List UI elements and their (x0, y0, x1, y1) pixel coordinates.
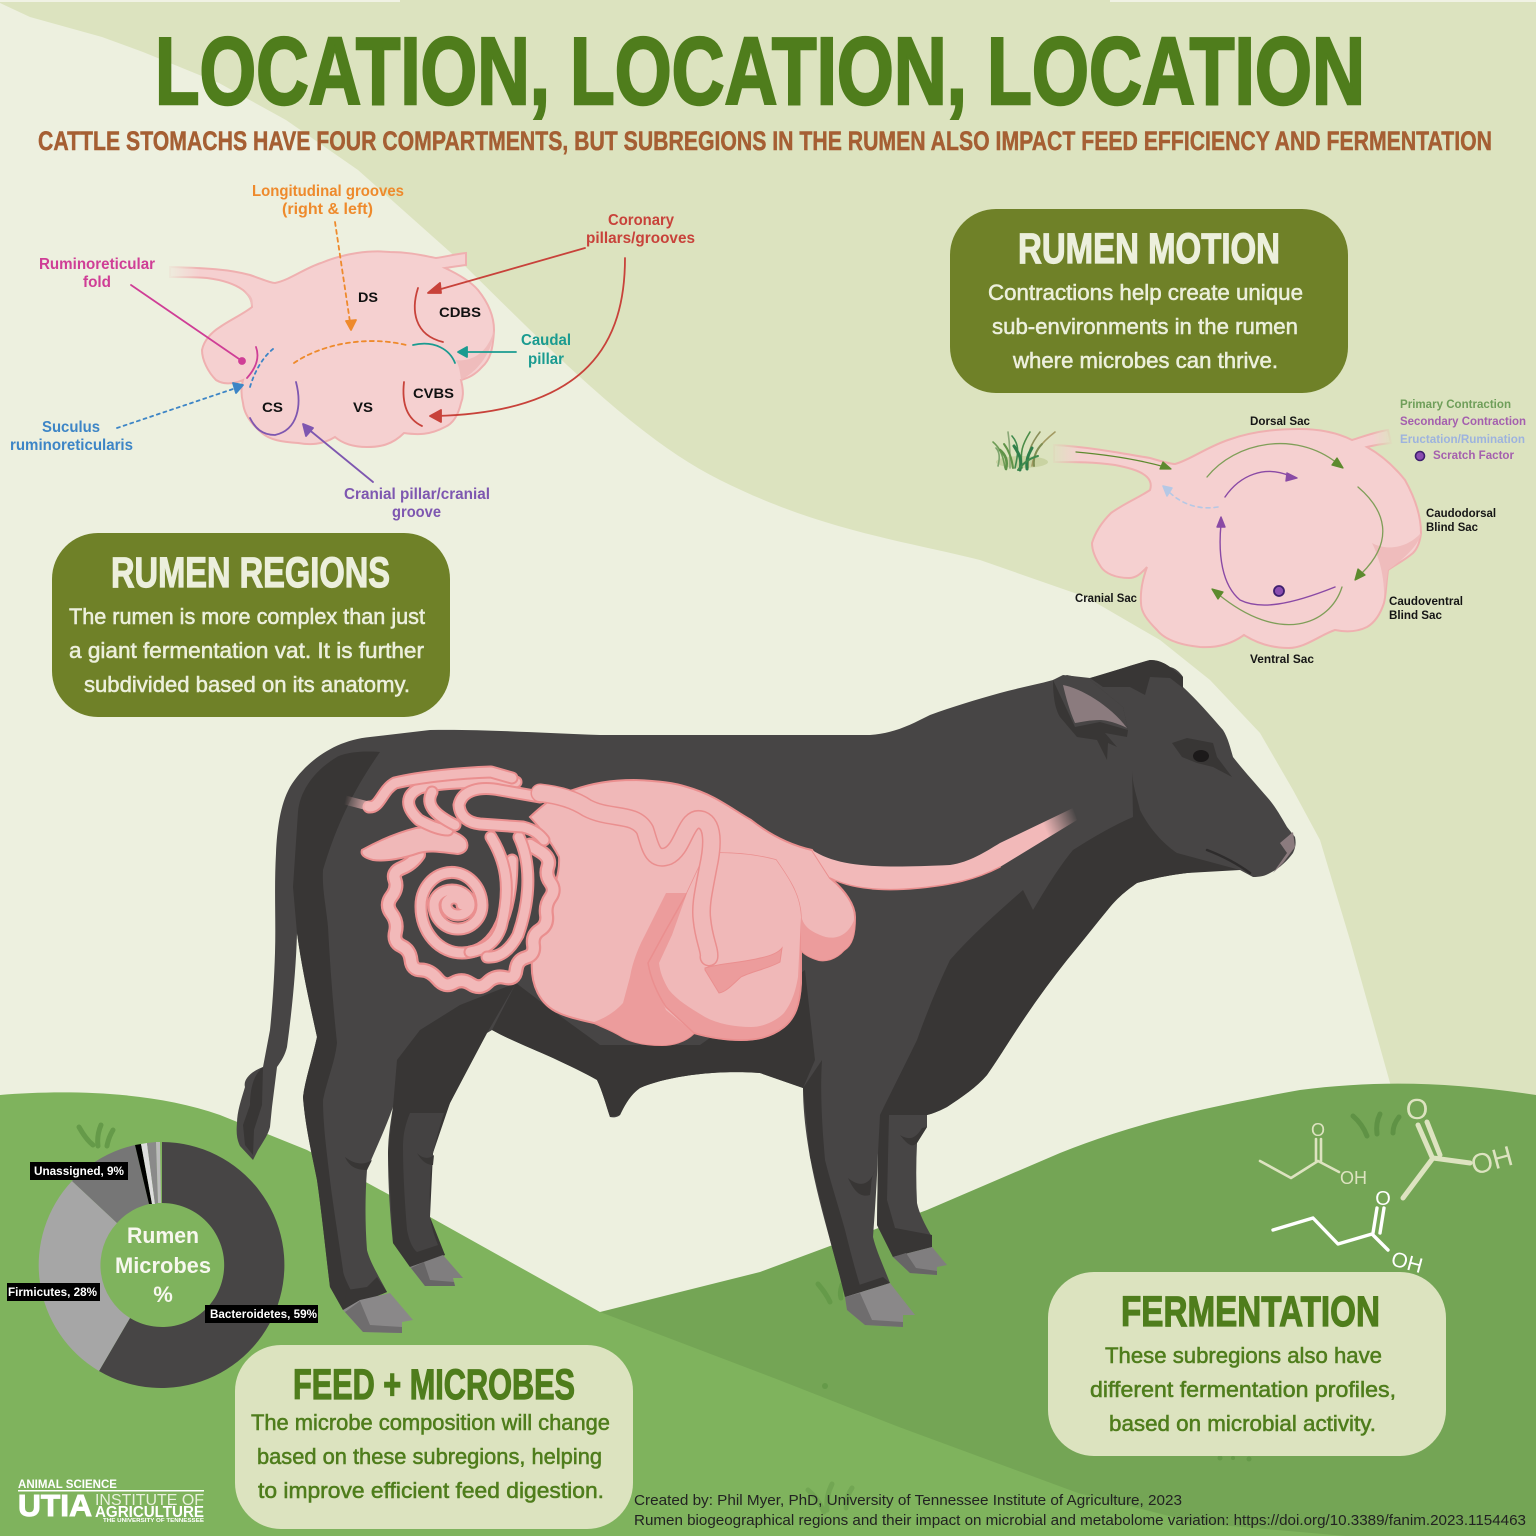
donut chart: rumen microbes (7, 1142, 318, 1388)
heading: fermentation: FERMENTATION (1121, 1288, 1380, 1336)
text: feed body: The microbe composition will change (251, 1410, 610, 1435)
logo: UTIA (18, 1479, 204, 1524)
label: cranial pillar (344, 486, 490, 521)
panel: rumen regions (52, 533, 450, 717)
sac labels (1075, 414, 1496, 666)
donut centre text: Microbes (115, 1253, 211, 1278)
footer credits: Created by: Phil Myer, PhD, University of Tennessee Institute of Agriculture, 2023 (634, 1492, 1182, 1509)
molecule: propionic acid (1260, 1120, 1367, 1188)
molecule: propionic acid: O (1311, 1120, 1325, 1140)
abomasum lobe (648, 853, 801, 1040)
label: suculus ruminoreticularis: ruminoreticularis (10, 437, 133, 454)
rumen shape (170, 251, 494, 447)
logo: UTIA: AGRICULTURE (95, 1504, 204, 1521)
label: longitudinal grooves: (right & left) (282, 201, 373, 218)
notch fold (705, 948, 782, 993)
sac labels: VS (353, 399, 373, 415)
donut centre text: % (153, 1282, 173, 1307)
cow silhouette (237, 660, 1296, 1310)
esophagus fade (1050, 440, 1080, 465)
arrows: secondary contraction (1217, 472, 1335, 605)
sac labels (262, 289, 481, 415)
shading: neck and chest (880, 768, 1240, 1115)
text: fermentation body (1090, 1343, 1396, 1436)
data label: firmicutes: Firmicutes, 28% (8, 1285, 97, 1299)
donut centre text: Rumen (127, 1223, 199, 1248)
hoof: near hind (343, 1293, 413, 1333)
spiral colon (421, 860, 512, 953)
shading: knee marks (345, 1127, 927, 1196)
background: top edge strips (0, 0, 1536, 2)
right tube fade (1372, 426, 1394, 446)
title: LOCATION (987, 18, 1365, 125)
hoof: far fore (893, 1247, 947, 1275)
title: LOCATION, (155, 18, 550, 125)
colon loops (369, 772, 544, 840)
shading: rump and hind leg (293, 752, 380, 1310)
sac labels: Caudodorsal (1426, 506, 1496, 520)
icon: grass (993, 432, 1055, 470)
molecule: acetic acid: O (1406, 1094, 1428, 1126)
legend: Primary Contraction (1400, 397, 1511, 411)
cranial pillar (250, 382, 373, 482)
scratch factor dot (1274, 586, 1284, 596)
rumen shading (1372, 533, 1421, 600)
parallel colon strands (470, 837, 528, 957)
coronary pillars (403, 248, 625, 426)
text: feed body: to improve efficient feed digestion. (258, 1478, 604, 1503)
slice: firmicutes (39, 1181, 130, 1371)
legend (1400, 397, 1526, 462)
molecule: butyric acid: OH (1389, 1248, 1425, 1278)
main tube (540, 793, 711, 957)
rumen lower shading (594, 893, 694, 1045)
text: feed body: based on these subregions, helping (257, 1444, 602, 1469)
panel: fermentation (1048, 1272, 1446, 1456)
ruminoreticular fold (131, 285, 258, 378)
label: caudal pillar: pillar (528, 351, 564, 368)
anatomy labels (10, 183, 695, 521)
grass specks (822, 1383, 1252, 1462)
title: LOCATION, (570, 18, 967, 125)
near fore hoof band (845, 1277, 890, 1297)
label: ruminoreticular fold (39, 256, 155, 291)
label: suculus ruminoreticularis (10, 419, 133, 454)
data label: bacteroidetes: Bacteroidetes, 59% (210, 1307, 317, 1321)
sac labels: Ventral Sac (1250, 652, 1314, 666)
anatomy diagram: rumen regions (117, 222, 625, 482)
logo: UTIA: UTIA (18, 1488, 92, 1523)
panel: rumen motion (950, 209, 1348, 393)
text: rumen regions body: a giant fermentation vat. It is further (69, 638, 424, 663)
tract fading start (345, 800, 372, 807)
sac labels: Dorsal Sac (1250, 414, 1310, 428)
longitudinal grooves (294, 222, 406, 363)
arrows: primary contraction (1076, 444, 1383, 625)
rumen body (530, 780, 855, 1045)
suculus ruminoreticularis (117, 349, 273, 428)
wavy small intestine (388, 845, 553, 987)
mouth (1207, 850, 1250, 873)
sac labels: CVBS (413, 385, 454, 401)
sac labels: CS (262, 399, 283, 415)
far hind leg interior (403, 1113, 444, 1252)
label: cranial pillar: groove (392, 504, 441, 521)
cecum (362, 827, 467, 861)
text: fermentation body: These subregions also have (1105, 1343, 1382, 1368)
text: rumen motion body: sub-environments in the rumen (992, 314, 1298, 339)
text: rumen regions body: The rumen is more complex than just (69, 604, 425, 629)
sac labels: Blind Sac (1426, 520, 1478, 534)
arrow: eructation (1163, 486, 1218, 508)
panel: feed + microbes (235, 1345, 633, 1529)
text: feed body (251, 1410, 610, 1503)
shading: belly and far hind (388, 983, 516, 1267)
label: ruminoreticular fold: fold (83, 274, 111, 291)
ear (1053, 675, 1128, 760)
molecule: acetic acid (1403, 1094, 1516, 1198)
shading: far foreleg (877, 1115, 932, 1257)
rumen shading (243, 290, 494, 380)
logo: UTIA: THE UNIVERSITY OF TENNESSEE (103, 1518, 204, 1524)
label: longitudinal grooves: Longitudinal grooves (252, 183, 404, 200)
molecule: propionic acid: OH (1340, 1168, 1367, 1188)
label: longitudinal grooves (252, 183, 404, 218)
digestive tract (345, 772, 1077, 1045)
logo: UTIA: INSTITUTE OF (95, 1492, 204, 1509)
legend: Scratch Factor (1433, 448, 1514, 462)
data label: unassigned: Unassigned, 9% (34, 1164, 124, 1178)
legend: Eructation/Rumination (1400, 432, 1525, 446)
slice: unassigned (72, 1145, 149, 1223)
forelock (1090, 660, 1183, 695)
text: rumen motion body: where microbes can thrive. (1012, 348, 1278, 373)
molecule: acetic acid: OH (1468, 1140, 1516, 1181)
text: fermentation body: based on microbial activity. (1109, 1411, 1376, 1436)
motion diagram: rumen contractions (993, 397, 1526, 666)
hoof: far hind (410, 1255, 463, 1286)
belly shade (492, 970, 815, 1117)
reticulum lower shading (801, 915, 855, 960)
text: rumen motion body (988, 280, 1303, 373)
title (155, 18, 1365, 125)
molecule: butyric acid: O (1375, 1188, 1391, 1210)
footer credits: Rumen biogeographical regions and their impact on microbial and metabolome variation: https://doi.org/10.3389/fanim.2023.1154463 (634, 1512, 1526, 1529)
eye (1172, 738, 1232, 777)
label: ruminoreticular fold: Ruminoreticular (39, 256, 155, 273)
esophagus fade (165, 262, 200, 282)
caudal pillar (413, 344, 516, 363)
legend: Secondary Contraction (1400, 414, 1526, 428)
hoof: near fore (845, 1283, 915, 1327)
label: suculus ruminoreticularis: Suculus (42, 419, 100, 436)
cow (237, 660, 1296, 1333)
heading: rumen motion: RUMEN MOTION (1018, 225, 1280, 273)
text: rumen motion body: Contractions help create unique (988, 280, 1303, 305)
slices: minor taxa (135, 1142, 161, 1204)
label: caudal pillar: Caudal (521, 332, 571, 349)
text: rumen regions body: subdivided based on its anatomy. (84, 672, 410, 697)
label: coronary pillars: Coronary (608, 212, 674, 229)
nose (1273, 832, 1295, 873)
label: caudal pillar (521, 332, 571, 368)
heading: rumen regions: RUMEN REGIONS (111, 549, 390, 597)
text: rumen regions body (69, 604, 425, 697)
esophagus edge (830, 867, 1000, 890)
sac labels: Caudoventral (1389, 594, 1463, 608)
tail tuft shading (243, 1067, 263, 1155)
hill: right darker green (600, 1084, 1536, 1536)
shading: near hind hoof band (343, 1277, 387, 1310)
molecule: butyric acid (1273, 1188, 1425, 1278)
shading: near foreleg edge (803, 1060, 862, 1297)
rumen shape (1054, 429, 1421, 648)
text: fermentation body: different fermentation profiles, (1090, 1377, 1396, 1402)
label: coronary pillars: pillars/grooves (586, 230, 695, 247)
footer credits (634, 1492, 1526, 1529)
logo: UTIA: ANIMAL SCIENCE (18, 1479, 117, 1491)
sac labels: Blind Sac (1389, 608, 1442, 622)
heading: feed + microbes: FEED + MICROBES (293, 1361, 575, 1409)
label: coronary pillars (586, 212, 695, 247)
sac labels: Cranial Sac (1075, 591, 1137, 605)
donut centre text (115, 1223, 211, 1307)
sac labels: CDBS (439, 304, 481, 320)
sac labels: DS (358, 289, 378, 305)
hill: left lighter green (0, 1092, 1346, 1536)
esophagus (812, 808, 1077, 890)
grass tufts (79, 1114, 1399, 1512)
slice: bacteroidetes (99, 1142, 284, 1388)
label: cranial pillar: Cranial pillar/cranial (344, 486, 490, 503)
